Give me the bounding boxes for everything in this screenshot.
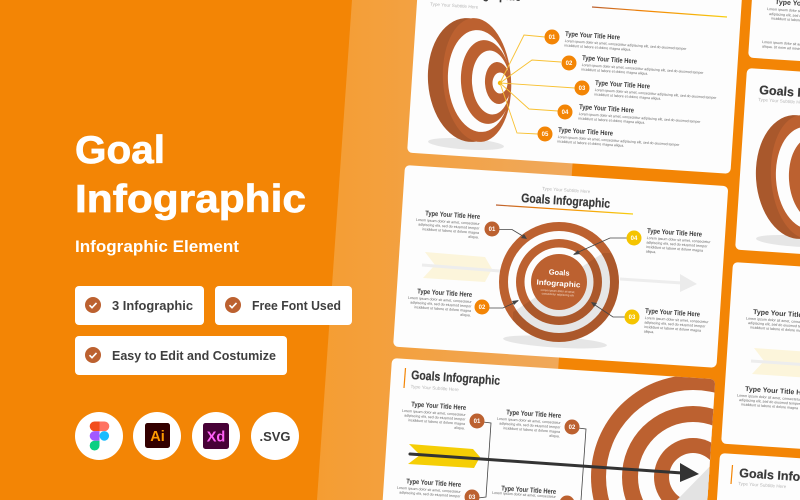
callout 02: aliqua. [460, 313, 471, 317]
block 02: Lorem ipsum dolor sit amet, consectetur [497, 417, 562, 425]
slide 3 heading: Goals Infographic [411, 368, 501, 388]
subtitle: Infographic Element [75, 238, 240, 256]
target shadow [503, 333, 607, 351]
block 02 [496, 409, 580, 439]
block 01 [401, 401, 484, 431]
callout 04: 04 [631, 236, 638, 242]
callout 02: incididunt ut labore et dolore magna [414, 305, 471, 313]
callout 01: Type Your Title Here [425, 210, 480, 221]
slide C lower text: adipiscing elit, sed do eiusmod tempor [739, 398, 800, 406]
panel: slide 2 with front target [393, 165, 728, 368]
callout 01: adipiscing elit, sed do eiusmod tempor [418, 222, 480, 231]
step 03: 03 [579, 86, 586, 92]
icon: Figma [75, 412, 123, 460]
panel: right slide A [748, 0, 800, 79]
callout 01: incididunt ut labore et dolore magna [422, 227, 479, 235]
feature chip: Easy to Edit and Costumize [75, 336, 287, 375]
slide 3 heading [404, 368, 501, 392]
target centre label: Goals [548, 267, 570, 278]
step 01: Lorem ipsum dolor sit amet, consectetur adipiscing elit, sed do eiusmod tempor [565, 39, 687, 51]
step 05 [538, 126, 681, 152]
bullseye target [499, 222, 619, 342]
step 04: Lorem ipsum dolor sit amet, consectetur adipiscing elit, sed do eiusmod tempor [579, 112, 701, 124]
connector arrows [489, 230, 627, 317]
block 02: 02 [569, 425, 576, 431]
block 04 [492, 485, 574, 500]
step 02: incididunt ut labore et dolore magna aliqua. [581, 67, 648, 76]
callout 01 [415, 210, 500, 240]
callout 03: incididunt ut labore et dolore magna [644, 325, 701, 333]
slide 2 heading [496, 186, 633, 214]
step 03: incididunt ut labore et dolore magna aliqua. [594, 92, 661, 101]
callout 02: adipiscing elit, sed do eiusmod tempor [410, 300, 472, 309]
step 04: incididunt ut labore et dolore magna aliqua. [578, 116, 645, 125]
target centre label: Lorem ipsum dolor sit amet, [541, 288, 576, 294]
large arrow [408, 444, 699, 482]
block 03: Lorem ipsum dolor sit amet, consectetur [397, 486, 462, 494]
panel: slide 3 with large target [382, 358, 715, 500]
bracket connectors [478, 422, 586, 500]
faded arrow [422, 252, 697, 292]
callout 04: adipiscing elit, sed do eiusmod tempor [646, 240, 708, 249]
callout 02: 02 [479, 305, 486, 311]
target centre label [536, 267, 581, 298]
block 04: Type Your Title Here [501, 485, 556, 496]
block 03: Type Your Title Here [406, 478, 461, 489]
slide 3 heading: Type Your Subtitle Here [410, 384, 459, 392]
step 05: 05 [542, 132, 549, 138]
slide 1 heading: Type Your Subtitle Here [430, 2, 479, 10]
callout 04: aliqua. [646, 249, 656, 254]
callout 04 [626, 228, 712, 258]
block 02: adipiscing elit, sed do eiusmod tempor [499, 421, 561, 430]
step 03: Lorem ipsum dolor sit amet, consectetur adipiscing elit, sed do eiusmod tempor [595, 88, 717, 100]
callout 03: adipiscing elit, sed do eiusmod tempor [644, 320, 706, 329]
callout 04: Lorem ipsum dolor sit amet, consectetur [647, 236, 711, 244]
step 03 [574, 80, 718, 105]
callout 02 [407, 288, 490, 318]
3D target [424, 15, 515, 152]
callout 03: Type Your Title Here [645, 308, 700, 319]
panel: slide 1 with 3D target [407, 0, 742, 174]
title: Goal [75, 129, 165, 172]
step 01: Type Your Title Here [565, 31, 620, 42]
block 01: aliqua. [454, 426, 465, 430]
light diagonal band [317, 0, 584, 500]
icon: Adobe Illustrator [133, 412, 181, 460]
block 04: Lorem ipsum dolor sit amet, consectetur [492, 491, 557, 499]
slide C lower text: incididunt ut labore et dolore magna [741, 403, 798, 410]
step 01: incididunt ut labore et dolore magna aliqua. [564, 43, 631, 52]
feature chip: Easy to Edit and Costumize: Easy to Edit and Costumize [112, 348, 276, 363]
step 04: 04 [562, 110, 569, 116]
block 01: adipiscing elit, sed do eiusmod tempor [404, 413, 466, 422]
callout 02: Lorem ipsum dolor sit amet, consectetur [408, 296, 473, 304]
callout 03: Lorem ipsum dolor sit amet, consectetur [645, 316, 709, 324]
callout 03: 03 [629, 315, 636, 321]
step 02: Type Your Title Here [582, 55, 637, 66]
step 03: Type Your Title Here [595, 80, 650, 91]
callout 03 [624, 308, 710, 338]
step 04 [558, 104, 702, 129]
icon: SVG [251, 412, 299, 460]
feature chip: 3 Infographic [75, 286, 204, 325]
callout 04: incididunt ut labore et dolore magna [646, 245, 703, 253]
callout 03: aliqua. [644, 329, 654, 334]
callout 04: Type Your Title Here [647, 228, 702, 239]
panel: right slide C [721, 262, 800, 465]
connector lines [500, 35, 575, 134]
slide C lower text: Lorem ipsum dolor sit amet, consectetur [737, 394, 800, 402]
block 03: adipiscing elit, sed do eiusmod tempor [399, 490, 461, 499]
title [75, 129, 306, 221]
step 02: 02 [566, 61, 573, 67]
step 02: Lorem ipsum dolor sit amet, consectetur adipiscing elit, sed do eiusmod tempor [582, 63, 704, 75]
feature chip: 3 Infographic: 3 Infographic [112, 298, 193, 313]
icon: Adobe XD: Xd [207, 430, 225, 446]
icon: Adobe XD [192, 412, 240, 460]
block 01: incididunt ut labore et dolore magna [408, 418, 465, 426]
slide 2 heading: Goals Infographic [521, 191, 611, 211]
callout 01: 01 [489, 227, 496, 233]
step 02 [562, 55, 705, 80]
callout 01: aliqua. [468, 235, 479, 239]
block 01: Type Your Title Here [411, 401, 466, 412]
slide A text [762, 0, 800, 51]
icon: SVG: .SVG [260, 430, 290, 444]
panel: right slide D [708, 453, 800, 500]
step 01 [544, 30, 688, 56]
title: Infographic [75, 178, 306, 221]
slide C lower text [737, 386, 800, 410]
icon: Adobe Illustrator: Ai [150, 429, 165, 445]
step 05: incididunt ut labore et dolore magna aliqua. [557, 139, 624, 148]
faded arrow [751, 348, 800, 378]
feature chip: Free Font Used: Free Font Used [252, 298, 341, 313]
block 03 [396, 478, 480, 500]
slide 1 heading [430, 0, 727, 17]
large target [591, 376, 715, 500]
step 05: Type Your Title Here [558, 127, 613, 138]
block 02: Type Your Title Here [506, 409, 561, 420]
block 02: incididunt ut labore et dolore magna [503, 426, 560, 434]
slide 2 heading: Type Your Subtitle Here [542, 186, 591, 194]
block 01: Lorem ipsum dolor sit amet, consectetur [402, 409, 467, 417]
step 05: Lorem ipsum dolor sit amet, consectetur adipiscing elit, sed do eiusmod tempor [558, 135, 680, 147]
3D target [756, 115, 800, 247]
callout 01: Lorem ipsum dolor sit amet, consectetur [416, 218, 481, 226]
feature chip: Free Font Used [215, 286, 352, 325]
step 04: Type Your Title Here [579, 104, 634, 115]
callout 02: Type Your Title Here [417, 288, 472, 299]
target centre label: consectetur adipiscing elit [542, 291, 574, 298]
target centre label: Infographic [536, 278, 581, 289]
slide D heading: Type Your Subtitle Here [738, 481, 787, 489]
slide C upper text [746, 309, 800, 333]
step 01: 01 [549, 35, 556, 41]
block 01: 01 [474, 419, 481, 425]
block 02: aliqua. [549, 434, 560, 438]
panel: right slide B [735, 68, 800, 271]
